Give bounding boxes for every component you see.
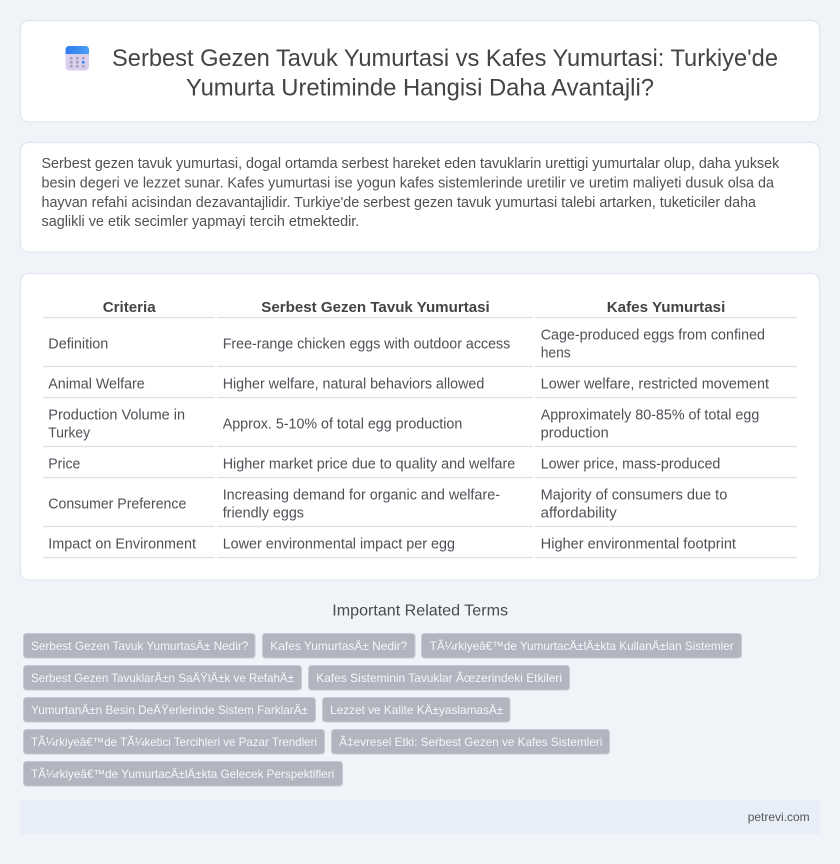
table row: Production Volume in Turkey: [48, 407, 759, 441]
table row: Consumer Preference: affordability: [541, 505, 618, 521]
table header row: [103, 299, 725, 316]
table row: Production Volume in Turkey: Turkey: [48, 425, 91, 441]
table row: Definition: Cage-produced eggs from confined: [541, 327, 765, 343]
table row: Price: Lower price, mass-produced: [541, 456, 720, 472]
table row: Animal Welfare: [48, 376, 769, 392]
table header row: Kafes Yumurtasi: [607, 299, 725, 316]
table row: Production Volume in Turkey: Approx. 5-10% of total egg production: [223, 416, 462, 432]
tag 2: [262, 634, 415, 658]
tag 4: [24, 666, 302, 690]
panel: introduction: [20, 142, 820, 252]
table row: Consumer Preference: Majority of consumers due to: [541, 487, 727, 503]
table row: Animal Welfare: Animal Welfare: [48, 376, 145, 392]
table row: Definition: Free-range chicken eggs with outdoor access: [223, 336, 510, 352]
table header row: Serbest Gezen Tavuk Yumurtasi: [261, 299, 490, 316]
table row: Impact on Environment: Lower environmental impact per egg: [223, 536, 455, 552]
text block: introduction paragraph: besin degeri ve lezzet sunar. Kafes yumurtasi ise yogun kafes sistemlerinde uretilir ve uretim maliyeti dusuk olsa da: [42, 175, 774, 191]
footer: petrevi.com: [748, 810, 810, 824]
table row: Consumer Preference: Consumer Preference: [48, 496, 186, 512]
table row: Consumer Preference: Increasing demand for organic and welfare-: [223, 487, 500, 503]
title: Serbest Gezen Tavuk Yumurtasi vs Kafes Yumurtasi: Turkiye'de: [112, 45, 778, 72]
tag 2: Kafes YumurtasÄ± Nedir?: [270, 639, 408, 653]
tag 8: TÃ¼rkiyeâ€™de TÃ¼ketici Tercihleri ve Pazar Trendleri: [31, 735, 317, 749]
table header row: Criteria: [103, 299, 156, 316]
table row: Consumer Preference: friendly eggs: [223, 505, 304, 521]
panel: comparison table: [20, 274, 820, 580]
title: [112, 45, 778, 102]
tag 7: Lezzet ve Kalite KÄ±yaslamasÄ±: [330, 703, 504, 717]
table row: Price: Price: [48, 456, 80, 472]
footer: [20, 800, 820, 834]
text block: introduction paragraph: Serbest gezen tavuk yumurtasi, dogal ortamda serbest hareket eden tavuklarin urettigi yumurtalar olup, daha yuksek: [42, 156, 780, 172]
text block: introduction paragraph: saglikli ve etik secimler yapmayi tercih etmektedir.: [42, 214, 359, 230]
table row: Production Volume in Turkey: Approximately 80-85% of total egg: [541, 407, 759, 423]
table row: Production Volume in Turkey: production: [541, 425, 609, 441]
tag 3: [422, 634, 742, 658]
text block: introduction paragraph: [42, 156, 780, 230]
table row: Price: Higher market price due to quality and welfare: [223, 456, 515, 472]
table row: Consumer Preference: [48, 487, 727, 521]
tag 10: [24, 762, 342, 786]
table row: Impact on Environment: [48, 536, 736, 552]
table row: Production Volume in Turkey: Production Volume in: [48, 407, 185, 423]
tag 3: TÃ¼rkiyeâ€™de YumurtacÄ±lÄ±kta KullanÄ±lan Sistemler: [430, 639, 734, 653]
panel: related term tags: [24, 634, 742, 786]
tag 1: [24, 634, 255, 658]
table row: Impact on Environment: Higher environmental footprint: [541, 536, 736, 552]
title: Yumurta Uretiminde Hangisi Daha Avantajli?: [186, 74, 654, 102]
table row: Definition: Definition: [48, 336, 108, 352]
tag 4: Serbest Gezen TavuklarÄ±n SaÄŸlÄ±k ve RefahÄ±: [31, 671, 294, 685]
icon: calendar: [66, 46, 89, 70]
tag 1: Serbest Gezen Tavuk YumurtasÄ± Nedir?: [31, 639, 249, 653]
table row: Definition: [48, 327, 765, 361]
tag 10: TÃ¼rkiyeâ€™de YumurtacÄ±lÄ±kta Gelecek Perspektifleri: [31, 767, 334, 781]
table row: Definition: hens: [541, 345, 571, 361]
tag 5: [308, 666, 570, 690]
tag 6: YumurtanÄ±n Besin DeÄŸerlerinde Sistem FarklarÄ±: [31, 703, 308, 717]
table row: Animal Welfare: Lower welfare, restricted movement: [541, 376, 769, 392]
heading: Important Related Terms: Important Related Terms: [332, 603, 508, 620]
tag 6: [24, 698, 316, 722]
tag 8: [24, 730, 324, 754]
tag 7: [322, 698, 510, 722]
tag 9: [332, 730, 610, 754]
text block: introduction paragraph: hayvan refahi acisindan dezavantajlidir. Turkiye'de serbest gezen tavuk yumurtasi talebi artarken, tuketiciler daha: [42, 195, 756, 211]
table row: Price: [48, 456, 720, 472]
panel: title card: [20, 20, 820, 122]
table row: Impact on Environment: Impact on Environment: [48, 536, 196, 552]
table row: Animal Welfare: Higher welfare, natural behaviors allowed: [223, 376, 484, 392]
tag 9: Ã‡evresel Etki: Serbest Gezen ve Kafes Sistemleri: [339, 735, 602, 749]
tag 5: Kafes Sisteminin Tavuklar Ãœzerindeki Etkileri: [316, 671, 562, 685]
